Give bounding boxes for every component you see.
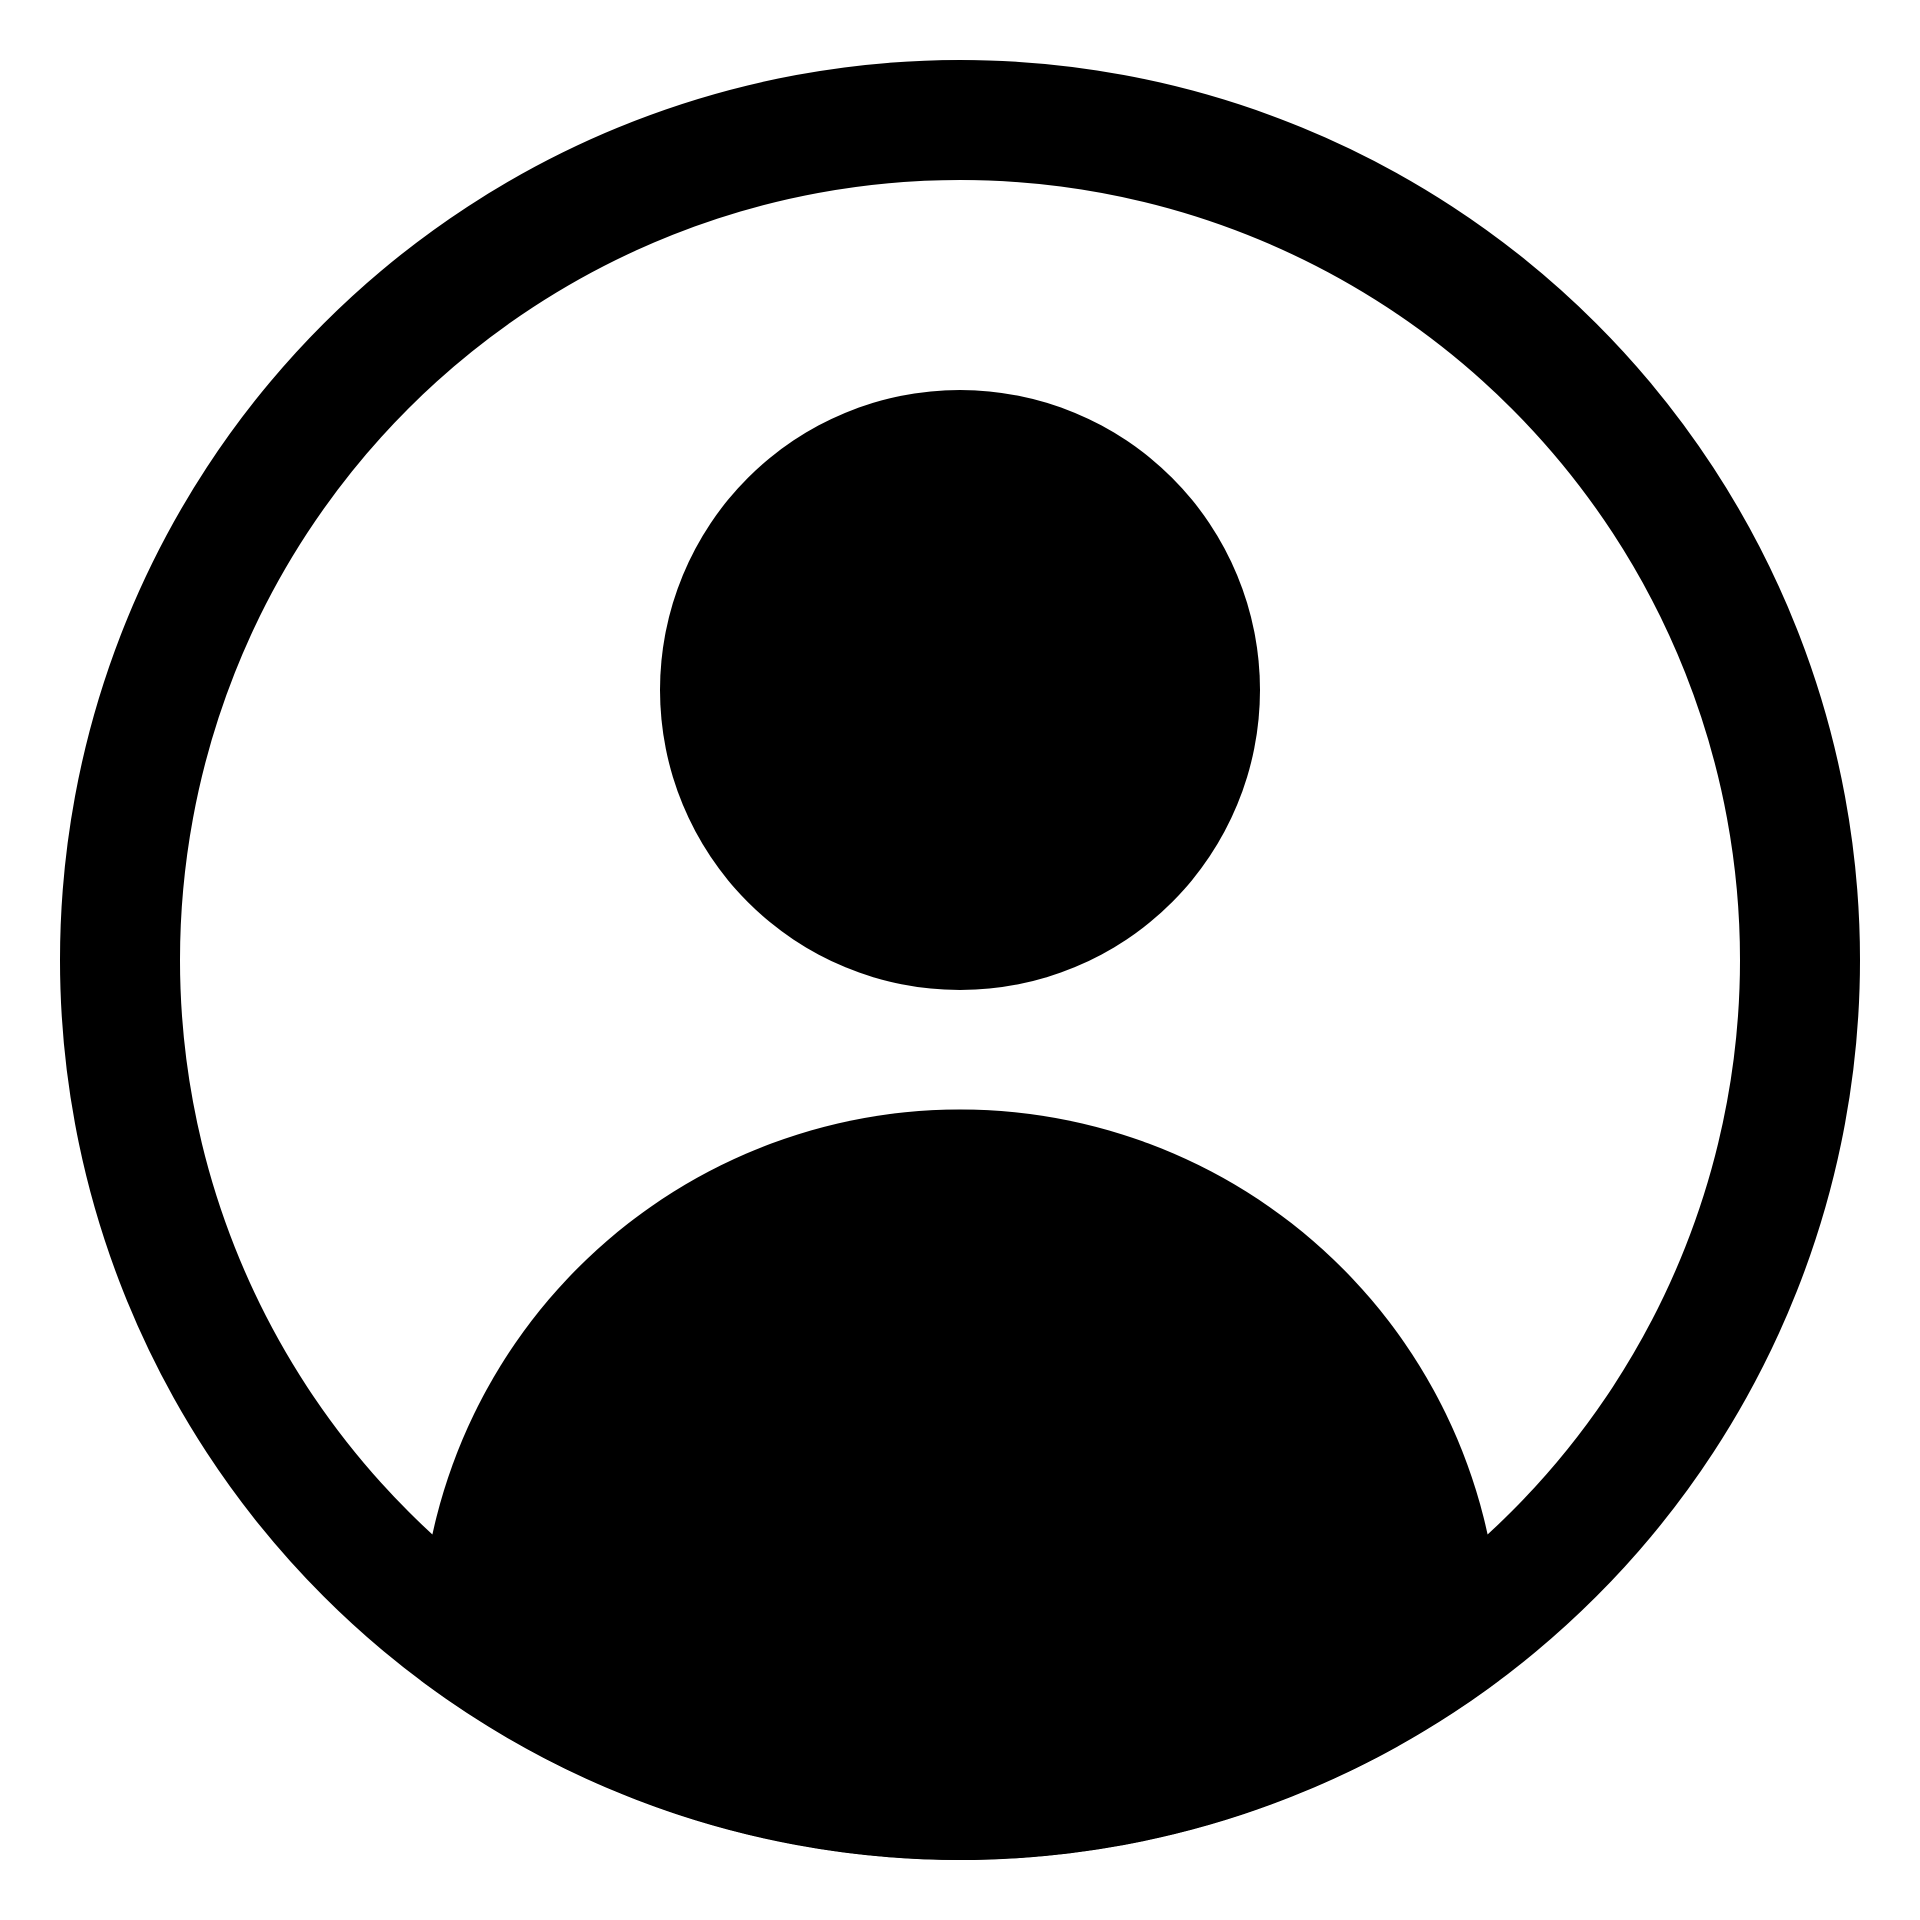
icon: head [660,390,1260,990]
icon: shoulders [420,1109,1500,1860]
icon: outer ring [120,120,1800,1800]
